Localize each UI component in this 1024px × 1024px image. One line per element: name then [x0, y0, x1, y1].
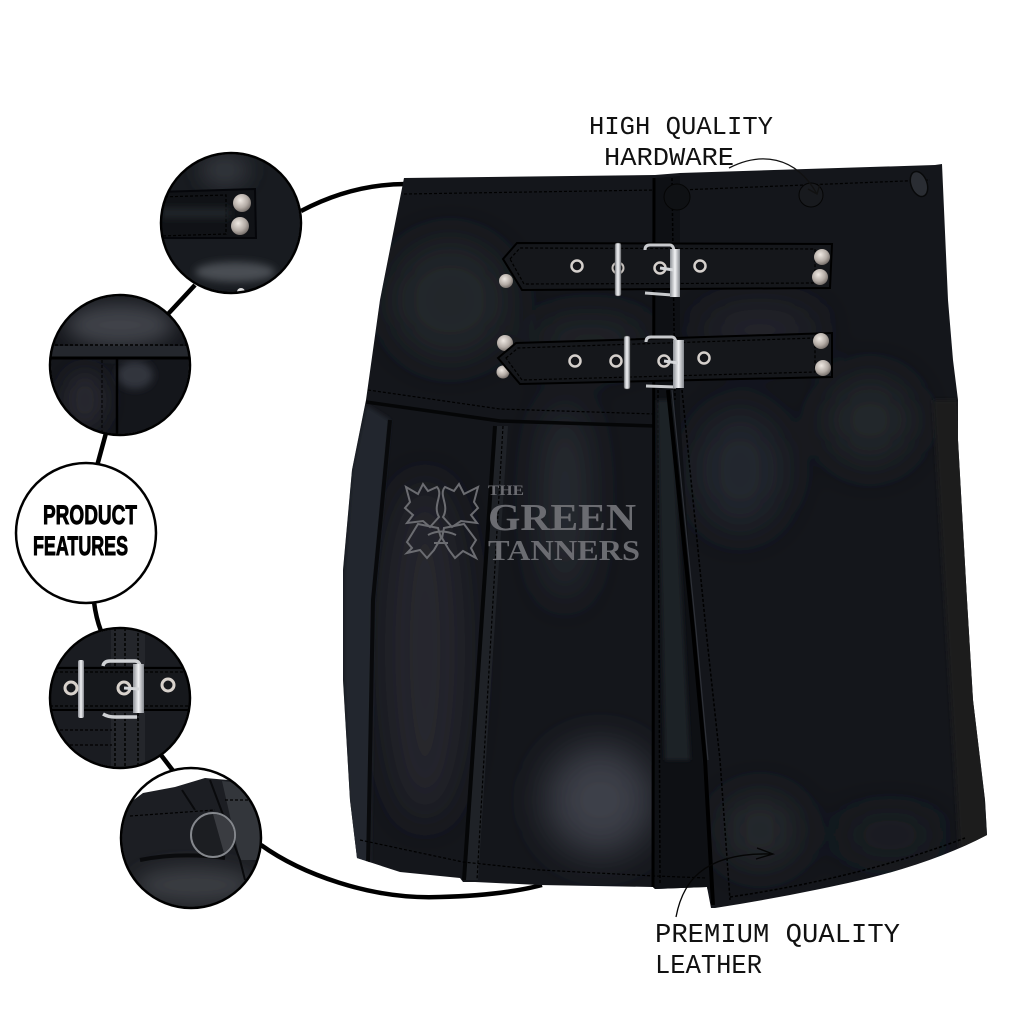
- callout: premium quality leather: LEATHER: [655, 952, 762, 982]
- title badge: product features: FEATURES: [33, 531, 128, 561]
- feature circle: strap rivets: [160, 150, 305, 296]
- wordmark: [488, 483, 640, 567]
- feature circle: stitched pleat seam: [50, 295, 190, 435]
- snap buttons: [664, 169, 931, 210]
- left side pleat panel: [344, 405, 390, 865]
- arrow to leather: [676, 848, 773, 917]
- waist yoke seam: [366, 402, 655, 426]
- right side panel: [936, 402, 987, 849]
- connector lines between feature circles: [94, 184, 542, 897]
- feature circle: snap button: [120, 768, 265, 908]
- callout: premium quality leather: [655, 848, 900, 982]
- callout: high quality hardware: HARDWARE: [604, 143, 734, 173]
- strap and buckle 1: [499, 243, 832, 297]
- wordmark: GREEN: [488, 497, 636, 539]
- callout: premium quality leather: PREMIUM QUALITY: [655, 921, 900, 951]
- title badge: product features: PRODUCT: [43, 500, 137, 530]
- product photo: black leather kilt: [330, 150, 1000, 920]
- centre placket: [653, 314, 708, 890]
- title badge: product features: [16, 463, 156, 603]
- wordmark: THE: [488, 483, 524, 499]
- overlapping front flap edge: [668, 390, 713, 905]
- wordmark: TANNERS: [488, 536, 640, 567]
- leaf face emblem: [405, 484, 478, 558]
- callout: high quality hardware: [589, 112, 820, 194]
- feature circle: buckle: [50, 628, 190, 768]
- strap and buckle 2: [496, 333, 832, 389]
- watermark: The Green Tanners logo: [405, 483, 640, 567]
- hem stitching: [360, 840, 707, 878]
- callout: high quality hardware: HIGH QUALITY: [589, 112, 773, 142]
- arrow to snap button: [729, 159, 820, 194]
- centre pleat seam: [463, 426, 508, 880]
